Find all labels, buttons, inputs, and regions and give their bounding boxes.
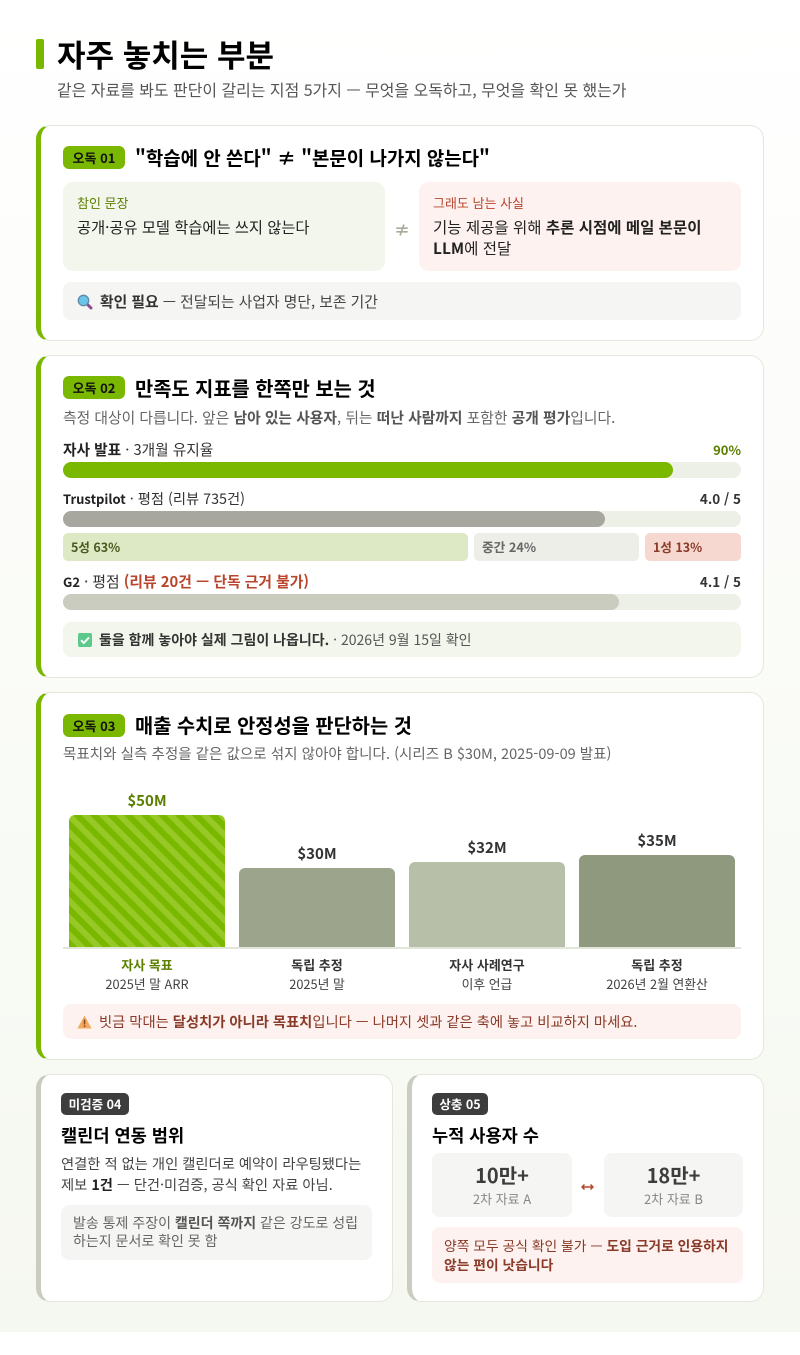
panel: unverified 04 (36, 1074, 393, 1302)
warning note 05 text: 않는 편이 낫습니다 (444, 1254, 553, 1274)
icon: magnifier (78, 294, 93, 310)
Trustpilot label: Trustpilot · 평점 (리뷰 735건) (63, 488, 245, 509)
value: $32M: $32M (467, 837, 507, 858)
bar: $32M (409, 862, 565, 947)
remaining fact label: 그래도 남는 사실 (433, 193, 524, 212)
segment: 1 star: 1성 13% (653, 537, 702, 556)
card 01 background (36, 125, 764, 341)
note text: 확인 필요 — 전달되는 사업자 명단, 보존 기간 (100, 291, 378, 312)
G2 value: 4.1 / 5 (700, 571, 741, 591)
panel: misreading 01 (36, 125, 764, 341)
badge 05 (432, 1093, 488, 1115)
segment: 1 star (645, 533, 741, 561)
warning note 05 (432, 1227, 743, 1283)
note: check needed (63, 282, 741, 320)
axis label 2: 독립 추정 (291, 955, 343, 974)
axis label 3: 이후 언급 (462, 974, 512, 993)
body 04 (61, 1153, 361, 1195)
stat B source: 2차 자료 B (644, 1189, 703, 1208)
badge 05: 상충 05 (439, 1094, 481, 1113)
company metric label: 자사 발표 · 3개월 유지율 (63, 439, 213, 460)
axis label 1: 자사 목표 (121, 955, 173, 974)
card 05 background (407, 1074, 764, 1302)
conclusion text: 둘을 함께 놓아야 실제 그림이 나옵니다. · 2026년 9월 15일 확인 (99, 630, 472, 650)
panel: misreading 02 (36, 355, 764, 678)
axis label 3: 자사 사례연구 (449, 955, 525, 974)
remaining fact text: LLM에 전달 (433, 237, 511, 259)
Trustpilot value: 4.0 / 5 (700, 488, 741, 508)
bar: target $50M (69, 815, 225, 947)
description 02: 측정 대상이 다릅니다. 앞은 남아 있는 사용자, 뒤는 떠난 사람까지 포함한 공개 평가입니다. (63, 407, 615, 428)
badge 02: 오독 02 (73, 378, 115, 397)
quoted sentence box (63, 182, 385, 271)
stat B value: 18만+ (647, 1160, 700, 1189)
badge 04 (61, 1093, 129, 1115)
axis label 4: 2026년 2월 연환산 (606, 974, 708, 993)
badge 03 (63, 714, 125, 737)
segment: middle: 중간 24% (482, 537, 536, 556)
title: 자주 놓치는 부분 (57, 31, 274, 76)
company metric value: 90% (713, 440, 741, 459)
quoted sentence text: 공개·공유 모델 학습에는 쓰지 않는다 (77, 216, 310, 238)
stat A source: 2차 자료 A (473, 1189, 531, 1208)
badge 01 (63, 146, 125, 169)
warning note 05 text (444, 1235, 728, 1274)
quoted sentence label: 참인 문장 (77, 193, 128, 212)
value: $30M: $30M (297, 843, 337, 864)
arrow: conflict (581, 1184, 594, 1190)
segment: 5 star (63, 533, 468, 561)
body 04: 제보 1건 — 단건·미검증, 공식 확인 자료 아님. (61, 1174, 333, 1195)
note 04 text: 하는지 문서로 확인 못 함 (73, 1231, 217, 1251)
heading 05: 누적 사용자 수 (432, 1123, 539, 1148)
bar chart (63, 790, 741, 993)
axis label 1: 2025년 말 ARR (105, 974, 189, 993)
icon: warning (78, 1016, 92, 1028)
segment: middle (474, 533, 639, 561)
remaining fact box (419, 182, 741, 271)
G2 label: G2 · 평점 (리뷰 20건 — 단독 근거 불가) (63, 571, 309, 592)
company metric bar (63, 462, 741, 478)
badge 01: 오독 01 (73, 148, 115, 167)
heading 03: 매출 수치로 안정성을 판단하는 것 (135, 710, 412, 739)
axis label 1 (105, 955, 189, 993)
description 03: 목표치와 실측 추정을 같은 값으로 섞지 않아야 합니다. (시리즈 B $30M, 2025-09-09 발표) (63, 743, 611, 764)
badge 04: 미검증 04 (69, 1094, 121, 1113)
note 04 text: 발송 통제 주장이 캘린더 쪽까지 같은 강도로 성립 (73, 1213, 358, 1233)
bar: $35M (579, 855, 735, 947)
title accent bar (36, 39, 44, 69)
axis label 2 (289, 955, 345, 993)
chart baseline (63, 947, 741, 949)
stat A value: 10만+ (475, 1160, 529, 1189)
warning text: 빗금 막대는 달성치가 아니라 목표치입니다 — 나머지 셋과 같은 축에 놓고 비교하지 마세요. (99, 1011, 637, 1032)
note 04 (61, 1205, 372, 1260)
bar: $30M (239, 868, 395, 947)
Trustpilot bar (63, 511, 741, 527)
heading 02: 만족도 지표를 한쪽만 보는 것 (135, 373, 376, 402)
badge 03: 오독 03 (73, 716, 115, 735)
remaining fact text (433, 216, 701, 259)
heading 01: "학습에 안 쓴다" ≠ "본문이 나가지 않는다" (135, 144, 490, 171)
axis label 4 (606, 955, 708, 993)
card 03 background (36, 692, 764, 1060)
card 04 background (36, 1074, 393, 1302)
panel: conflict 05 (407, 1074, 764, 1302)
axis label 2: 2025년 말 (289, 974, 345, 993)
body 04: 연결한 적 없는 개인 캘린더로 예약이 라우팅됐다는 (61, 1153, 361, 1174)
heading 04: 캘린더 연동 범위 (61, 1123, 184, 1148)
axis label 4: 독립 추정 (631, 955, 683, 974)
stat box B (604, 1153, 743, 1217)
icon: check mark (78, 633, 92, 647)
warning note 05 text: 양쪽 모두 공식 확인 불가 — 도입 근거로 인용하지 (444, 1235, 728, 1255)
value: $35M: $35M (637, 830, 677, 851)
not-equal sign: ≠ (394, 217, 410, 241)
axis label 3 (449, 955, 525, 993)
G2 bar (63, 594, 741, 610)
segment: 5 star: 5성 63% (71, 537, 120, 556)
value: $50M: $50M (127, 790, 167, 811)
conclusion note (63, 622, 741, 657)
card 02 background (36, 355, 764, 678)
note 04 text (73, 1213, 358, 1251)
remaining fact text: 기능 제공을 위해 추론 시점에 메일 본문이 (433, 216, 701, 238)
warning note (63, 1004, 741, 1039)
stat box A (432, 1153, 572, 1217)
subtitle: 같은 자료를 봐도 판단이 갈리는 지점 5가지 — 무엇을 오독하고, 무엇을 확인 못 했는가 (57, 77, 626, 101)
panel: misreading 03 (36, 692, 764, 1060)
badge 02 (63, 376, 125, 399)
